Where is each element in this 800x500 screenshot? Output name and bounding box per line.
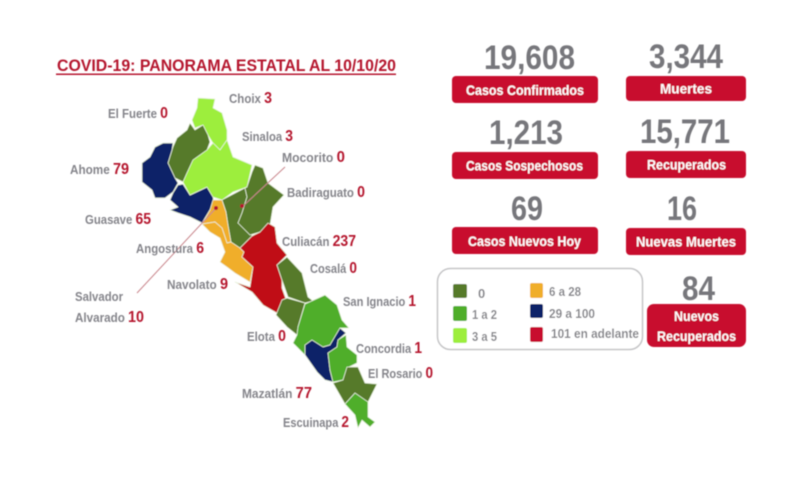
stat: nuevos recuperados: 84	[682, 270, 715, 308]
region: El Rosario	[333, 367, 377, 404]
stat: casos sospechosos: Casos Sospechosos	[466, 158, 583, 174]
legend item: 0	[453, 284, 485, 301]
stat: nuevas muertes: Nuevas Muertes	[636, 234, 736, 250]
stat: muertes	[626, 38, 746, 101]
label: Badiraguato: Badiraguato 0	[287, 184, 365, 201]
legend item: 3 a 5: 3 a 5	[472, 329, 497, 344]
region: Escuinapa	[345, 393, 375, 428]
region: Culiacan	[235, 223, 287, 313]
stat: nuevos recuperados	[647, 270, 746, 347]
label: Elota: Elota 0	[247, 328, 286, 345]
label: El Rosario: El Rosario 0	[368, 365, 433, 382]
label: Guasave: Guasave 65	[85, 211, 151, 228]
region: Sinaloa	[183, 140, 252, 200]
label: El Fuerte: El Fuerte 0	[108, 105, 168, 122]
stat: recuperados: Recuperados	[647, 158, 726, 172]
region: Navolato	[202, 222, 253, 282]
pointer line: Mocorito	[240, 167, 285, 208]
label: Navolato: Navolato 9	[167, 276, 228, 293]
stat: nuevos recuperados: Recuperados	[657, 329, 736, 344]
label: Salvador Alvarado: Salvador	[75, 289, 123, 304]
label: Salvador Alvarado	[75, 289, 144, 326]
region: El Fuerte	[168, 123, 210, 182]
pointer line: Salvador Alvarado	[137, 206, 218, 293]
region: Choix	[192, 98, 227, 150]
label: Choix: Choix 3	[229, 90, 272, 107]
stat: muertes: Muertes	[660, 82, 712, 96]
region: Cosala	[277, 257, 313, 303]
label: Ahome: Ahome 79	[70, 161, 129, 178]
region: Elota	[276, 298, 305, 335]
region: Angostura	[202, 200, 231, 243]
legend	[438, 268, 642, 350]
region: Guasave	[170, 184, 214, 223]
label: Angostura: Angostura 6	[136, 240, 204, 257]
stat: casos nuevos hoy: 69	[511, 190, 543, 228]
region: Badiraguato	[238, 165, 284, 235]
map of Sinaloa	[142, 98, 377, 428]
legend item: 6 a 28: 6 a 28	[549, 284, 581, 299]
legend item: 101 en adelante: 101 en adelante	[551, 326, 639, 341]
legend item: 1 a 2	[453, 306, 497, 322]
stat: recuperados: 15,771	[640, 113, 730, 151]
region: Concordia	[328, 335, 357, 382]
legend item: 29 a 100	[530, 304, 595, 321]
label: Salvador Alvarado: Alvarado 10	[75, 309, 144, 326]
stat: casos sospechosos	[452, 114, 598, 179]
stat: nuevas muertes: 16	[667, 190, 697, 228]
stat: muertes: 3,344	[649, 38, 723, 76]
stat: nuevas muertes	[626, 190, 746, 255]
legend item: 1 a 2: 1 a 2	[472, 307, 497, 322]
region: Mazatlan	[305, 328, 346, 382]
label: Mazatlan: Mazatlán 77	[242, 385, 312, 402]
stat: casos confirmados	[452, 39, 598, 103]
title: COVID-19: PANORAMA ESTATAL AL 10/10/20	[57, 56, 396, 75]
legend item: 29 a 100: 29 a 100	[549, 306, 595, 321]
label: Culiacan: Culiacán 237	[282, 233, 356, 250]
region: Ahome	[142, 143, 178, 198]
stat: recuperados	[626, 113, 746, 178]
region: San Ignacio	[293, 295, 349, 355]
legend item: 6 a 28	[530, 283, 581, 299]
infographic content	[56, 38, 746, 431]
stat: casos confirmados: 19,608	[484, 39, 575, 77]
legend item: 3 a 5	[453, 328, 497, 344]
region: Mocorito	[222, 188, 252, 248]
label: Escuinapa: Escuinapa 2	[283, 414, 349, 431]
label: San Ignacio: San Ignacio 1	[343, 293, 416, 310]
label: Sinaloa: Sinaloa 3	[242, 128, 293, 145]
stat: casos sospechosos: 1,213	[489, 114, 563, 152]
label: Cosala: Cosalá 0	[310, 260, 357, 277]
stat: nuevos recuperados: Nuevos	[674, 309, 719, 324]
stat: casos nuevos hoy: Casos Nuevos Hoy	[468, 234, 581, 249]
label: Mocorito: Mocorito 0	[282, 149, 345, 166]
legend item: 0: 0	[478, 286, 485, 301]
label: Concordia: Concordia 1	[356, 340, 422, 357]
stat: casos confirmados: Casos Confirmados	[466, 83, 584, 98]
stat: casos nuevos hoy	[452, 190, 598, 254]
